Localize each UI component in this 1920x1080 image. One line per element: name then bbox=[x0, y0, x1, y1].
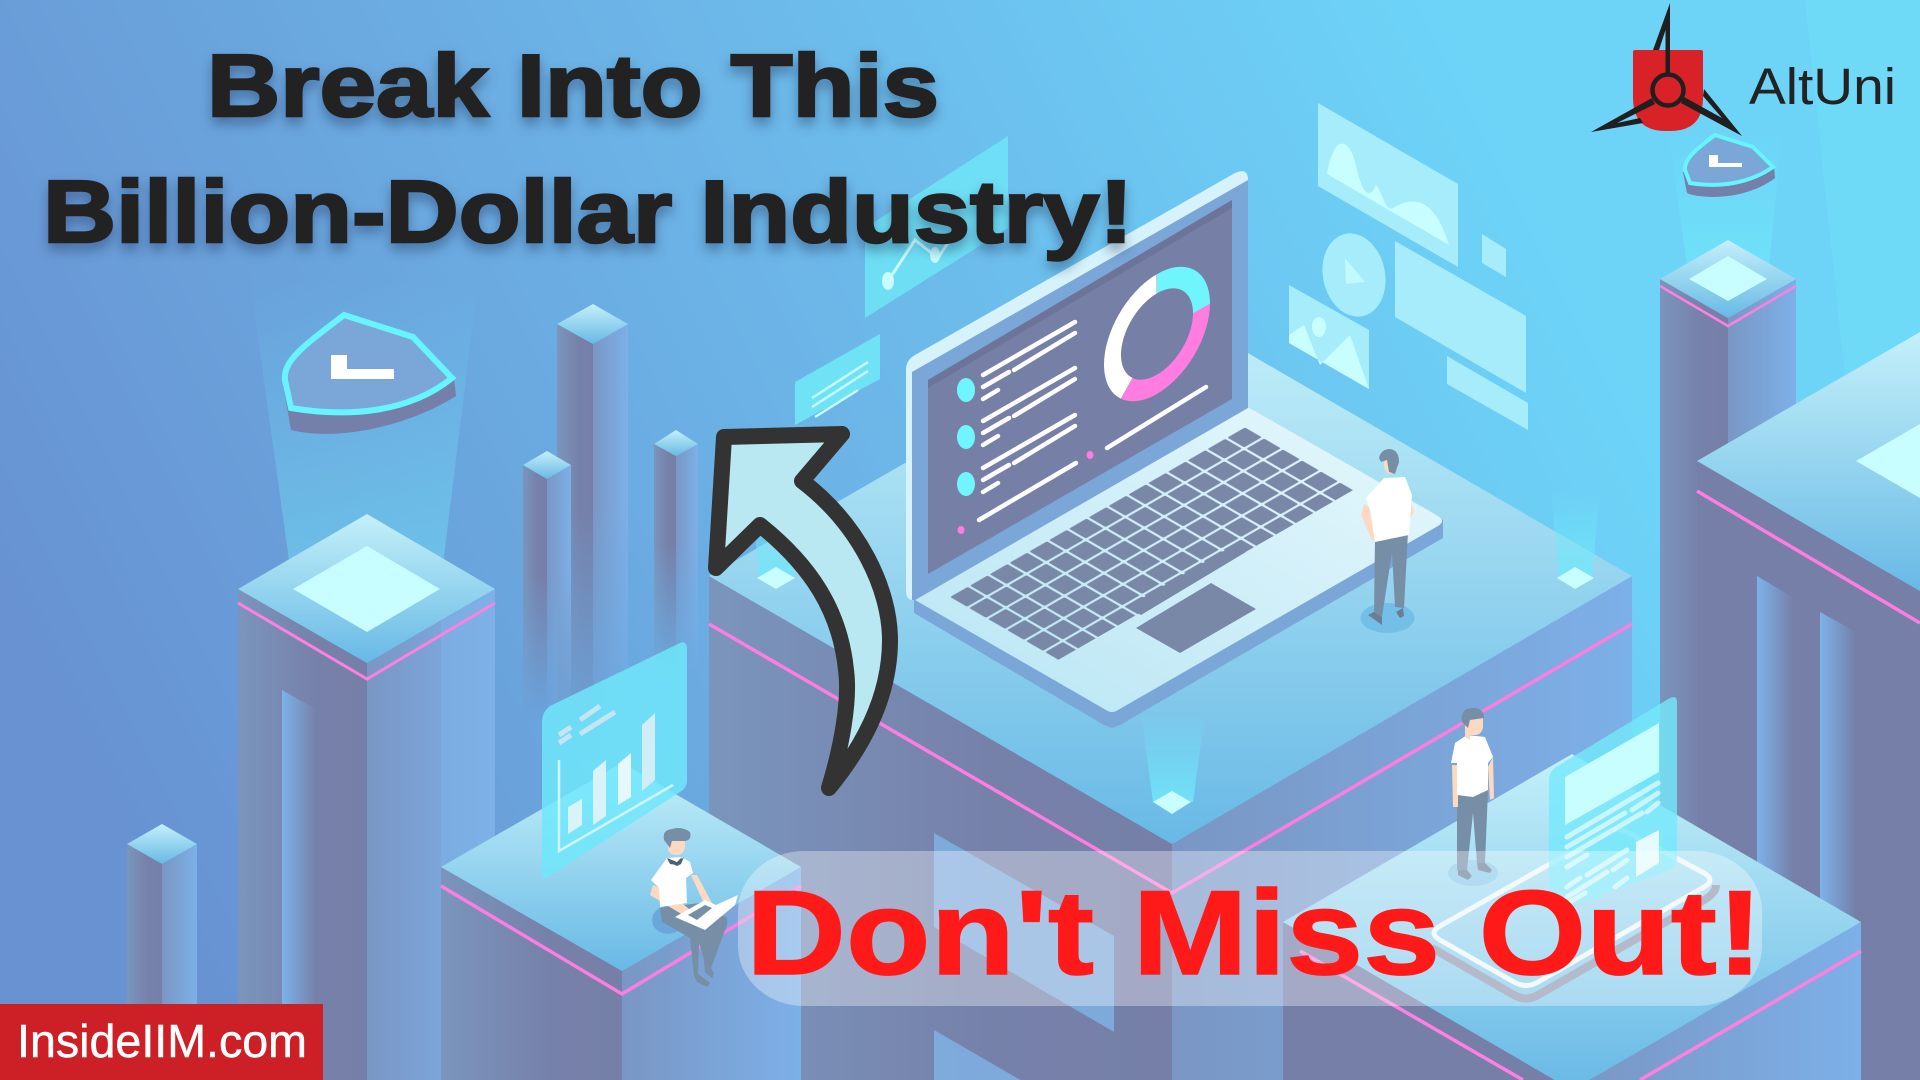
laptop base bbox=[915, 407, 1442, 712]
bar chart panel bbox=[542, 642, 687, 878]
big left pillar bbox=[238, 514, 495, 1080]
main platform top bbox=[709, 309, 1632, 844]
laptop screen frame bbox=[912, 180, 1248, 600]
floating text panel bbox=[795, 334, 880, 425]
callout pill bbox=[738, 851, 1762, 1006]
InsideIIM badge bbox=[0, 1004, 323, 1080]
person standing on lower platform bbox=[1448, 708, 1498, 886]
right shield icon bbox=[1683, 135, 1775, 197]
touchpad bbox=[1136, 583, 1256, 653]
laptop bbox=[906, 171, 1443, 728]
logo shield bbox=[1633, 50, 1703, 131]
logo compass bbox=[1591, 3, 1742, 136]
small bottom left pillar bbox=[127, 824, 197, 1010]
light beam left shield bbox=[250, 280, 478, 589]
title: Billion-Dollar Industry! bbox=[43, 162, 1133, 261]
small tag panel bbox=[1482, 234, 1506, 277]
platform light beam right bbox=[1551, 490, 1600, 589]
main platform faces bbox=[709, 576, 1632, 1080]
play circle bbox=[1315, 227, 1393, 323]
laptop base side bbox=[914, 407, 1443, 728]
keyboard bbox=[948, 426, 1355, 660]
light band right bbox=[1805, 0, 1920, 461]
large blank panel bbox=[1395, 241, 1526, 393]
floating panels right bbox=[1289, 103, 1528, 430]
image panel bbox=[1289, 285, 1369, 389]
lower right platform bbox=[1283, 754, 1861, 1080]
platform light beam centre bbox=[1141, 712, 1205, 814]
right tall pillar bbox=[1660, 240, 1796, 830]
platform light beam left bbox=[752, 500, 799, 589]
left shield icon bbox=[283, 315, 456, 434]
person sitting with laptop bbox=[650, 828, 738, 987]
tall middle pillar bbox=[557, 304, 628, 698]
screen text lines bbox=[979, 322, 1206, 520]
logo wordmark: AltUni bbox=[1749, 58, 1896, 115]
spacebar bbox=[1127, 545, 1246, 615]
title: Break Into This bbox=[207, 36, 939, 135]
person standing at laptop bbox=[1360, 449, 1414, 633]
document panel bbox=[1549, 697, 1677, 912]
curved arrow bbox=[716, 434, 890, 788]
laptop screen bbox=[928, 200, 1232, 574]
screen dots bbox=[957, 378, 1094, 534]
donut chart bbox=[1094, 227, 1220, 441]
title bbox=[43, 36, 1133, 261]
callout text: Don't Miss Out! bbox=[746, 866, 1763, 1000]
bar panel bbox=[1447, 356, 1528, 430]
floating panel with graph bbox=[865, 136, 1008, 318]
InsideIIM badge: InsideIIM.com bbox=[17, 1015, 307, 1067]
light beam right shield bbox=[1668, 130, 1782, 279]
lower left platform bbox=[441, 763, 801, 1080]
right building bbox=[1697, 332, 1920, 1080]
screen top shade bbox=[928, 200, 1232, 388]
short pillar two bbox=[654, 430, 698, 654]
AltUni logo bbox=[1591, 3, 1896, 136]
laptop screen outer light frame bbox=[906, 171, 1248, 600]
phone on platform bbox=[1432, 830, 1716, 998]
wave chart panel bbox=[1318, 103, 1458, 267]
short pillar one bbox=[523, 451, 571, 720]
